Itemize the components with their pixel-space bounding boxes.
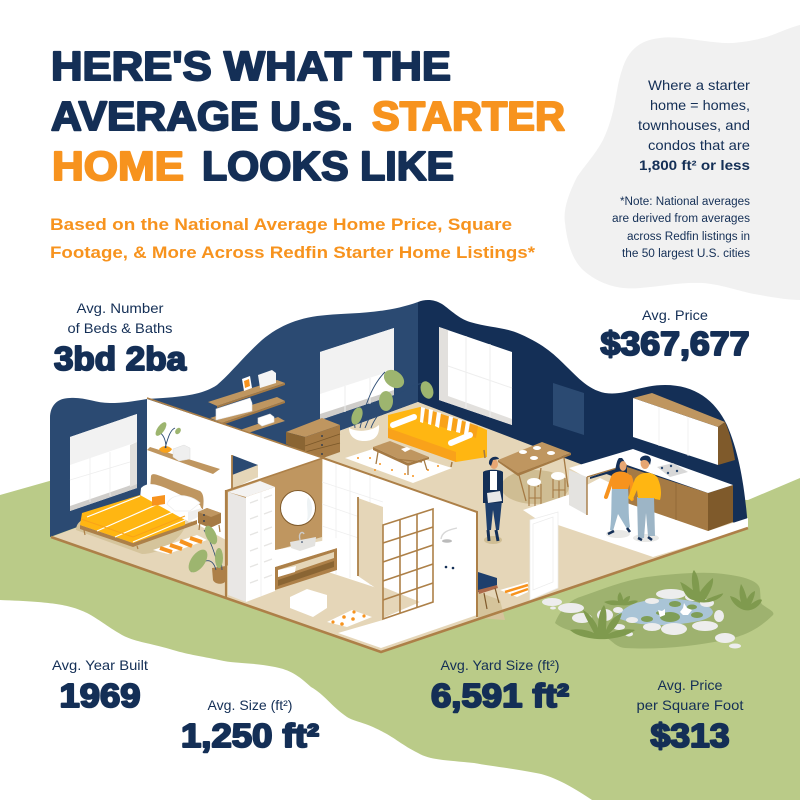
floor [51,402,748,652]
stat: yard size [431,657,569,714]
back left wall [50,302,418,537]
footnote text: are derived from averages [612,213,750,225]
partition top line [147,398,323,491]
couple [606,455,661,542]
coffee table [373,441,429,475]
definition text: townhouses, and [638,117,750,133]
water lilies [658,603,692,617]
title: AVERAGE U.S. [51,93,353,139]
white doorway panel [530,512,558,600]
dresser [286,418,340,458]
stat: price per square foot: Avg. Price [658,677,723,693]
yellow sofa [388,407,487,467]
tall linen cabinet [226,481,275,602]
bath ottoman [290,589,327,617]
bedroom striped rug [153,535,207,554]
stat: average size: Avg. Size (ft²) [208,697,292,713]
bedroom doorway [232,455,258,495]
dark wall window [439,327,512,425]
bathroom top wall line [323,458,477,617]
tan door panel [358,497,383,593]
title: HERE'S WHAT THE [51,43,451,89]
bathroom floor [226,570,383,633]
standing person [483,457,503,544]
footnote text: *Note: National averages [620,196,750,208]
stat: average price: $367,677 [600,325,750,362]
footnote text: the 50 largest U.S. cities [622,248,750,260]
pond water [615,599,713,625]
stones [542,589,741,648]
footnote text [612,196,750,260]
stat: yard size: 6,591 ft² [431,677,569,714]
house illustration [50,300,748,652]
subtitle: Based on the National Average Home Price, Square [50,215,512,234]
stat: year built: Avg. Year Built [52,657,148,673]
kitchen counter [569,449,733,531]
definition text [638,77,750,173]
dining table with stools [498,442,571,509]
stat: price per square foot [636,677,744,754]
title: LOOKS LIKE [202,143,454,189]
stat: price per square foot: per Square Foot [636,697,744,713]
title: HOME [52,143,184,189]
stat: average price [600,307,750,362]
green lawn background [0,478,800,800]
garden plants [570,570,762,639]
area rug [345,446,452,483]
bedroom back wall [147,399,323,540]
title: STARTER [372,93,565,139]
stat: beds and baths: 3bd 2ba [54,340,187,377]
definition text: home = homes, [650,97,750,113]
bedroom wall shelf [147,420,220,474]
nightstand [198,508,221,532]
stat: average price: Avg. Price [642,307,708,323]
plant in white pot [349,366,436,441]
bedroom window [70,414,137,511]
wall panel [553,383,584,435]
stat: year built [52,657,148,714]
bathroom tiled wall and shower room [322,458,477,648]
bed [76,474,204,554]
bathroom vanity [275,532,337,590]
garden pond [542,570,773,649]
definition text: 1,800 ft² or less [639,157,750,173]
hall rug [500,582,528,597]
stat: beds and baths: of Beds & Baths [68,320,172,336]
bedroom plant [185,524,226,584]
definition text: condos that are [648,137,750,153]
back right wall [418,300,748,528]
stat: beds and baths: Avg. Number [76,300,164,316]
left wall window [320,328,394,420]
hall chair [478,572,505,620]
woman [606,458,632,534]
lily pads [641,601,703,622]
stat: price per square foot: $313 [650,717,730,754]
stat: average size: 1,250 ft² [181,717,319,754]
glass shower frame [383,509,433,619]
subtitle [50,215,535,262]
grey note blob [565,25,800,300]
subtitle: Footage, & More Across Redfin Starter Home Listings* [50,243,535,262]
title [51,43,565,189]
definition text: Where a starter [648,77,750,93]
stat: yard size: Avg. Yard Size (ft²) [440,657,560,673]
stat: average size [181,697,319,754]
man [628,455,661,540]
kitchen white floor [523,478,748,557]
stat: year built: 1969 [60,677,140,714]
wall shelves [208,370,285,433]
bathroom brown wall with mirror [226,459,322,566]
upper cabinet [633,393,735,465]
bath mat [327,610,372,627]
stat: beds and baths [54,300,187,377]
house floor edge [51,528,748,652]
footnote text: across Redfin listings in [627,231,750,243]
